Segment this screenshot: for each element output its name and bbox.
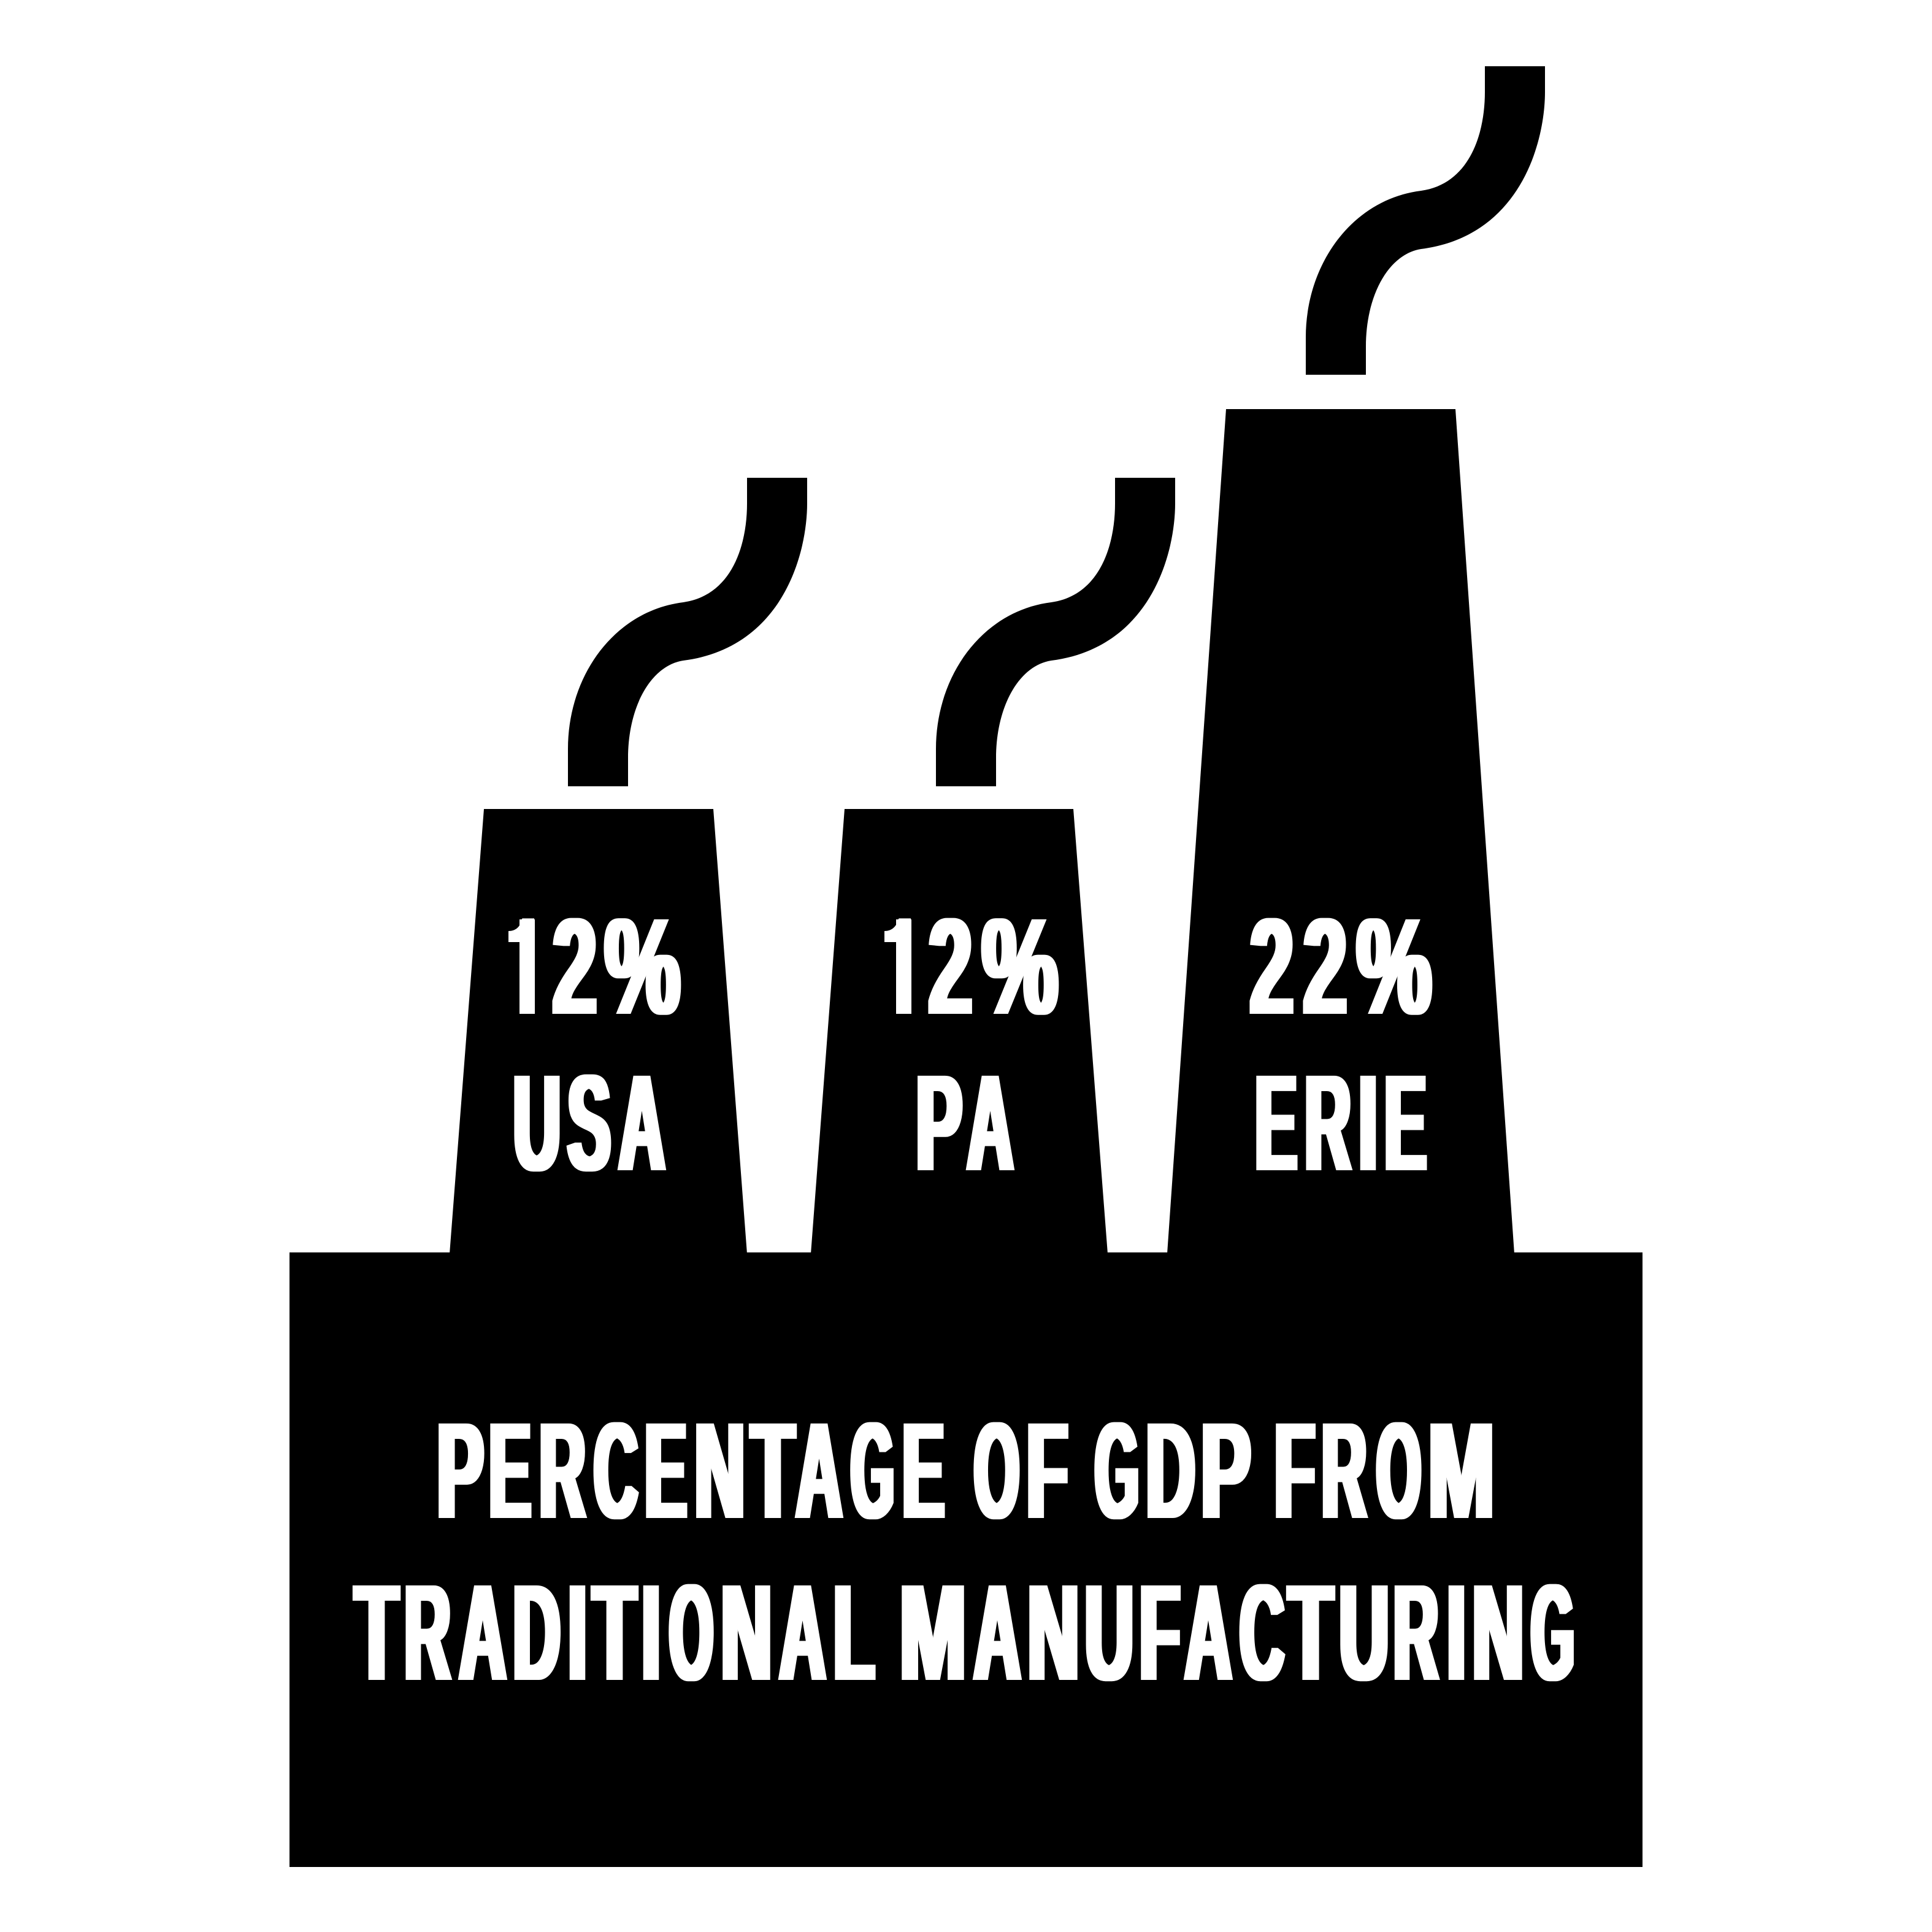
title: line 2: T <box>592 1556 637 1709</box>
title: line 2: N <box>721 1556 772 1709</box>
label: USA 12%: A <box>619 1046 665 1200</box>
title: line 1: R <box>1322 1394 1367 1547</box>
title: line 1 <box>437 1394 1494 1547</box>
smoke: Erie chimney <box>1306 66 1545 375</box>
label: PA 12%: A <box>967 1046 1013 1200</box>
title: line 2: I <box>1447 1556 1466 1709</box>
title: line 1: M <box>1428 1394 1494 1547</box>
title: line 1: N <box>694 1394 745 1547</box>
digit 1 refinement: PA <box>876 914 926 1018</box>
title: line 2: T <box>355 1556 399 1709</box>
title: line 2: F <box>1140 1556 1180 1709</box>
value: 12% USA: % <box>605 890 680 1043</box>
title: line 2: U <box>1340 1556 1389 1709</box>
smoke: USA chimney <box>568 478 807 786</box>
title: line 1: E <box>489 1394 531 1547</box>
label: USA 12% <box>510 865 680 1200</box>
value: 12% USA: 2 <box>553 890 597 1043</box>
factory base building <box>289 1252 1643 1867</box>
value: 12% PA: 1 <box>887 865 919 1051</box>
title: line 1: G <box>851 1394 894 1547</box>
value: 22% Erie: 2 <box>1250 890 1294 1043</box>
label: Erie 22%: E <box>1385 1046 1427 1200</box>
title: line 2: U <box>1085 1556 1133 1709</box>
title: line 1: G <box>1095 1394 1138 1547</box>
title: line 2: R <box>1393 1556 1438 1709</box>
name: ERIE: R <box>1305 1046 1351 1200</box>
title: line 1: P <box>437 1394 483 1547</box>
name: PA: P <box>916 1046 962 1200</box>
title: line 2: T <box>1288 1556 1333 1709</box>
value: 12% PA: 2 <box>929 890 972 1043</box>
title: line 1: O <box>974 1394 1019 1547</box>
title: line 1: D <box>1146 1394 1195 1547</box>
title: line 1: T <box>751 1394 795 1547</box>
title: line 2: I <box>642 1556 660 1709</box>
value: 12% USA: 1 <box>510 865 542 1051</box>
title: line 2: I <box>568 1556 586 1709</box>
title: line 1: P <box>1201 1394 1249 1547</box>
name: USA: U <box>513 1046 561 1200</box>
title: line 2: A <box>780 1556 826 1709</box>
name: USA: S <box>568 1046 611 1200</box>
value: 22% Erie: 2 <box>1303 890 1347 1043</box>
name: ERIE: I <box>1359 1046 1378 1200</box>
title: line 2 <box>355 1556 1574 1709</box>
title: line 1: O <box>1376 1394 1420 1547</box>
title: line 1: F <box>1027 1394 1068 1547</box>
title: line 1: F <box>1275 1394 1315 1547</box>
title: line 2: R <box>405 1556 450 1709</box>
title: line 1: A <box>796 1394 842 1547</box>
digit 1 refinement: USA <box>500 914 550 1018</box>
text: G <box>1531 1556 1574 1709</box>
title: line 1: E <box>645 1394 687 1547</box>
title: line 2: A <box>459 1556 506 1709</box>
value: 22% Erie: % <box>1357 890 1432 1043</box>
label: Erie 22% <box>1250 890 1432 1200</box>
factory silhouette <box>289 66 1643 1867</box>
title: line 2: A <box>1185 1556 1232 1709</box>
title: line 2: D <box>513 1556 561 1709</box>
chimney: USA <box>450 809 747 1254</box>
smoke: PA chimney <box>936 478 1175 786</box>
chimney: Erie <box>1167 409 1514 1254</box>
title: line 2: A <box>974 1556 1021 1709</box>
title: line 1: E <box>903 1394 945 1547</box>
value: 12% PA: % <box>982 890 1058 1043</box>
title: line 1: C <box>594 1394 638 1547</box>
title: line 2: C <box>1240 1556 1284 1709</box>
title: line 2: N <box>1028 1556 1079 1709</box>
title: line 2: L <box>834 1556 873 1709</box>
label: PA 12% <box>887 865 1058 1200</box>
chimney: PA <box>811 809 1108 1254</box>
title: line 2: O <box>670 1556 713 1709</box>
name: ERIE: E <box>1255 1046 1297 1200</box>
title: line 2: M <box>899 1556 967 1709</box>
title: line 2: N <box>1472 1556 1524 1709</box>
title: line 1: R <box>540 1394 585 1547</box>
